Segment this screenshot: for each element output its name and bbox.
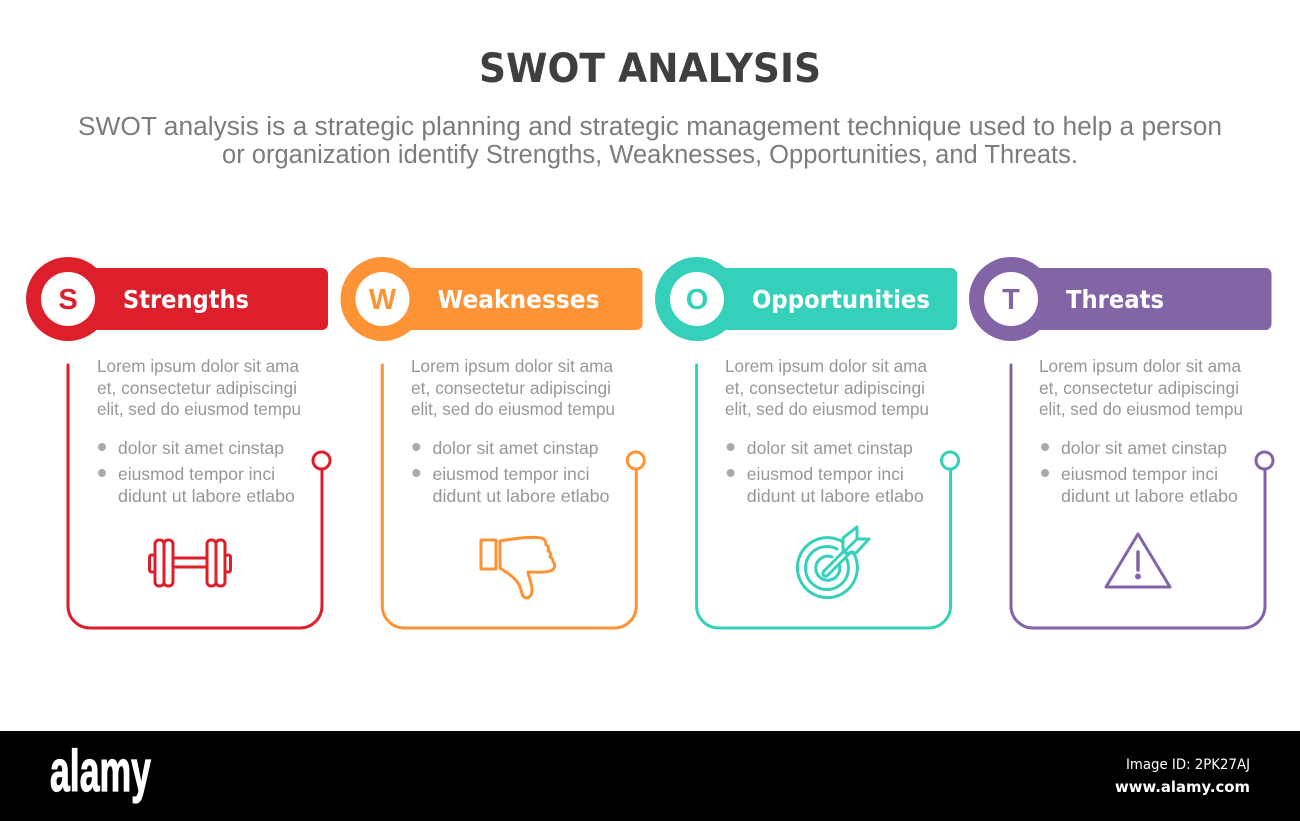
- bullet list: opportunities: didunt ut labore etlabo: [747, 486, 924, 506]
- header: weaknesses: Weaknesses: [438, 285, 600, 314]
- panel: strengths: [26, 257, 330, 628]
- outline frame: strengths: [68, 365, 330, 628]
- outline frame: threats: [1011, 365, 1273, 628]
- subtitle text: [78, 113, 1222, 169]
- bullet list: strengths: dolor sit amet cinstap: [118, 438, 284, 458]
- description: strengths: elit, sed do eiusmod tempu: [97, 399, 301, 419]
- bullet list: threats: didunt ut labore etlabo: [1061, 486, 1238, 506]
- alamy logo: alamy: [50, 739, 151, 804]
- header: opportunities: Opportunities: [752, 285, 930, 314]
- image id: Image ID: 2PK27AJ: [1126, 757, 1250, 773]
- icon: thumbs down: [481, 537, 555, 598]
- description: strengths: Lorem ipsum dolor sit ama: [97, 356, 299, 376]
- panel: opportunities: [655, 257, 958, 628]
- description: weaknesses: [411, 356, 615, 419]
- outline frame: weaknesses: [382, 365, 644, 628]
- title: SWOT ANALYSIS: [479, 46, 821, 92]
- bullet list: opportunities: dolor sit amet cinstap: [747, 438, 913, 458]
- bullet list: opportunities: [727, 438, 924, 506]
- icon: warning triangle: [1106, 534, 1170, 587]
- header: weaknesses: W: [369, 284, 397, 316]
- bullet list: opportunities: eiusmod tempor inci: [747, 464, 904, 484]
- website: www.alamy.com: [1115, 778, 1250, 796]
- bullet list: weaknesses: dolor sit amet cinstap: [432, 438, 598, 458]
- footer bar: [0, 731, 1300, 821]
- bullet list: strengths: eiusmod tempor inci: [118, 464, 275, 484]
- description: opportunities: Lorem ipsum dolor sit ama: [725, 356, 927, 376]
- description: strengths: [97, 356, 301, 419]
- icon: dumbbell: [150, 540, 230, 586]
- description: weaknesses: et, consectetur adipiscingi: [411, 378, 611, 398]
- description: weaknesses: elit, sed do eiusmod tempu: [411, 399, 615, 419]
- header: threats: [969, 257, 1272, 341]
- header: strengths: Strengths: [123, 285, 249, 314]
- header: opportunities: O: [686, 284, 708, 316]
- subtitle text: SWOT analysis is a strategic planning and strategic management technique used to help a person: [78, 113, 1222, 141]
- bullet list: threats: [1041, 438, 1238, 506]
- bullet list: strengths: didunt ut labore etlabo: [118, 486, 295, 506]
- bullet list: weaknesses: [412, 438, 610, 506]
- bullet list: threats: dolor sit amet cinstap: [1061, 438, 1227, 458]
- description: threats: et, consectetur adipiscingi: [1039, 378, 1239, 398]
- description: opportunities: et, consectetur adipiscingi: [725, 378, 925, 398]
- bullet list: strengths: [98, 438, 295, 506]
- panel: threats: [969, 257, 1273, 628]
- description: threats: [1039, 356, 1243, 419]
- panel: weaknesses: [340, 257, 644, 628]
- description: threats: elit, sed do eiusmod tempu: [1039, 399, 1243, 419]
- header: threats: T: [1002, 284, 1020, 316]
- description: opportunities: elit, sed do eiusmod tempu: [725, 399, 929, 419]
- description: weaknesses: Lorem ipsum dolor sit ama: [411, 356, 613, 376]
- subtitle text: or organization identify Strengths, Weaknesses, Opportunities, and Threats.: [222, 141, 1078, 169]
- bullet list: weaknesses: didunt ut labore etlabo: [432, 486, 610, 506]
- icon: target with arrow: [797, 527, 869, 598]
- header: weaknesses: [340, 257, 642, 341]
- description: strengths: et, consectetur adipiscingi: [97, 378, 297, 398]
- description: threats: Lorem ipsum dolor sit ama: [1039, 356, 1241, 376]
- header: threats: Threats: [1066, 285, 1164, 314]
- description: opportunities: [725, 356, 929, 419]
- header: opportunities: [655, 257, 957, 341]
- outline frame: opportunities: [697, 365, 958, 628]
- header: strengths: [26, 257, 328, 341]
- bullet list: weaknesses: eiusmod tempor inci: [432, 464, 590, 484]
- header: strengths: S: [58, 284, 78, 316]
- bullet list: threats: eiusmod tempor inci: [1061, 464, 1218, 484]
